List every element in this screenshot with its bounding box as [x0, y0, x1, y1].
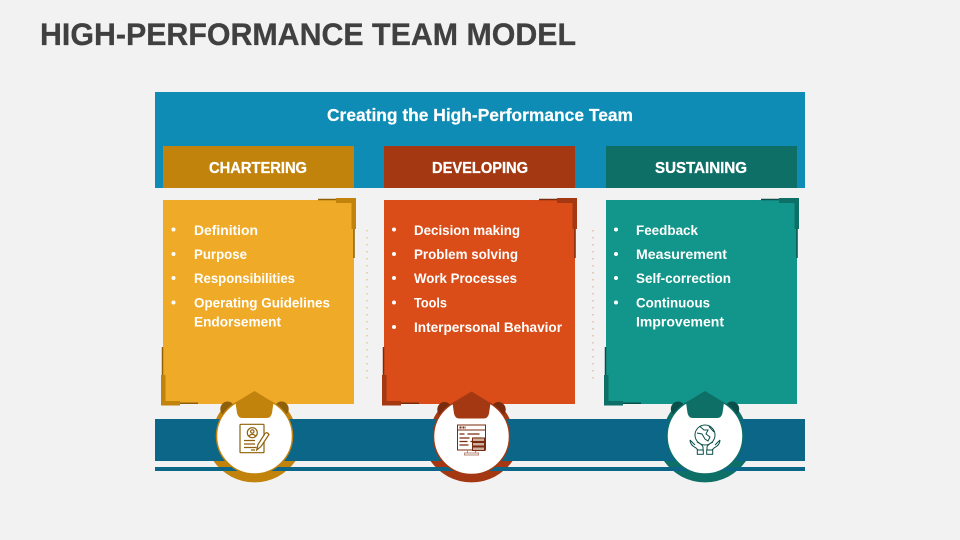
- card: developing: Interpersonal Behavior: [414, 319, 563, 335]
- icon: hands holding globe: [690, 425, 720, 454]
- title: HIGH-PERFORMANCE TEAM MODEL: [40, 16, 576, 52]
- card: developing: Tools: [414, 294, 447, 310]
- corner brackets: [382, 198, 577, 406]
- header: developing: [384, 146, 575, 188]
- card: chartering: [163, 200, 354, 404]
- card: chartering: Endorsement: [194, 314, 281, 330]
- card: chartering: Definition: [194, 222, 258, 238]
- card: chartering: Operating Guidelines: [194, 294, 330, 310]
- card: chartering: Responsibilities: [194, 270, 295, 286]
- icon: monitor with code and server: [458, 425, 486, 455]
- corner brackets: [604, 198, 799, 406]
- header: chartering: CHARTERING: [209, 160, 307, 177]
- card: developing: Decision making: [414, 222, 520, 238]
- card: developing: Problem solving: [414, 246, 518, 262]
- card: chartering: Purpose: [194, 246, 247, 262]
- card: sustaining: Feedback: [636, 222, 698, 238]
- card: sustaining: Continuous: [636, 294, 710, 310]
- corner brackets: [161, 198, 356, 406]
- panel: developing: [382, 146, 577, 406]
- bottom band: [155, 419, 805, 471]
- panel: sustaining: [604, 146, 799, 406]
- card: sustaining: [606, 200, 797, 404]
- icon: document with pencil: [240, 424, 269, 453]
- card: sustaining: Measurement: [636, 246, 727, 262]
- header: developing: DEVELOPING: [432, 160, 528, 177]
- header: sustaining: SUSTAINING: [655, 160, 747, 177]
- header: chartering: [163, 146, 354, 188]
- dotted separators: [367, 230, 593, 380]
- top banner: Creating the High-Performance Team: [327, 105, 633, 125]
- badge backing discs: [212, 394, 747, 482]
- panel: chartering: [161, 146, 356, 406]
- top banner: [155, 92, 805, 188]
- header: sustaining: [606, 146, 797, 188]
- card: developing: [384, 200, 575, 404]
- badge: chartering: [216, 391, 292, 474]
- badge: sustaining: [667, 391, 743, 474]
- badge: developing: [434, 392, 510, 474]
- card: developing: Work Processes: [414, 270, 517, 286]
- card: sustaining: Self-correction: [636, 270, 731, 286]
- card: sustaining: Improvement: [636, 314, 724, 330]
